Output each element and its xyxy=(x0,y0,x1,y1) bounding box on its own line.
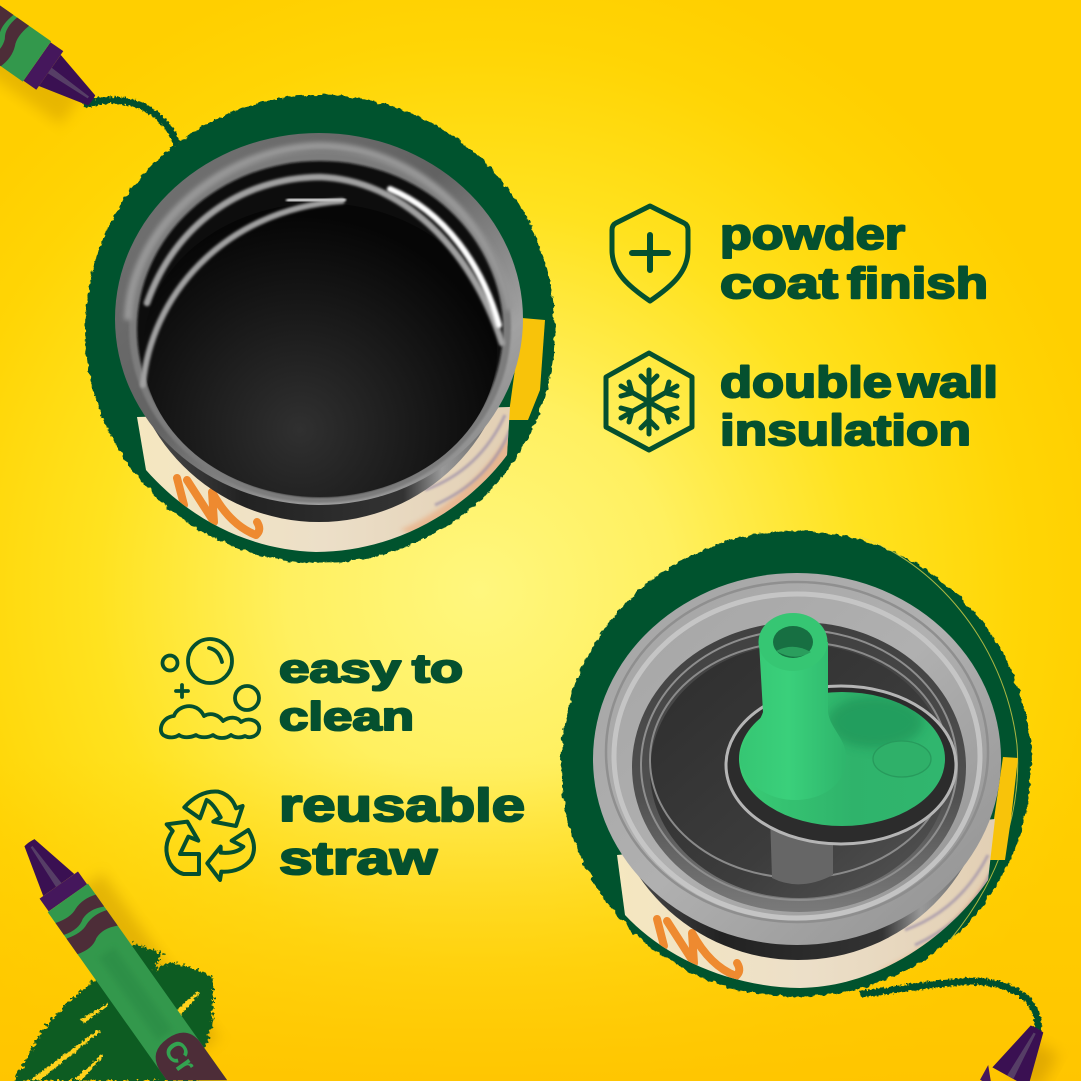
crayon bottom right xyxy=(980,1016,1065,1081)
crayon body xyxy=(48,884,227,1081)
tumbler with lid and straw xyxy=(593,573,1018,988)
straw xyxy=(740,613,846,800)
dark lower band xyxy=(606,580,990,960)
metal rim xyxy=(115,133,523,505)
feature: powder coat finish: powder xyxy=(720,210,905,259)
crayon bottom left xyxy=(9,828,227,1081)
cup body xyxy=(137,407,512,552)
cup body xyxy=(617,819,995,988)
feature: reusable straw: reusable xyxy=(279,779,525,831)
feature: powder coat finish xyxy=(720,210,988,308)
crayon logo oval xyxy=(147,1024,227,1081)
straw under lid xyxy=(770,815,833,884)
feature: easy to clean: clean xyxy=(279,695,414,739)
interior bore xyxy=(143,203,497,497)
crayon tip xyxy=(39,55,103,116)
icon: soap bubbles xyxy=(161,639,259,738)
feature: powder coat finish: finish xyxy=(847,259,988,308)
yellow tab xyxy=(508,318,545,420)
crayon scribble bottom left xyxy=(15,943,213,1081)
feature: double wall insulation: double xyxy=(720,358,892,407)
brush circle right xyxy=(561,531,1031,997)
crayon top left xyxy=(0,0,107,132)
feature: easy to clean: easy xyxy=(279,647,402,691)
disc button xyxy=(873,741,931,777)
crayon tip xyxy=(13,832,74,896)
yellow tab xyxy=(988,757,1018,860)
feature: double wall insulation: insulation xyxy=(720,406,971,455)
dark lower rim band xyxy=(127,140,511,522)
icon: recycle arrows xyxy=(166,792,254,880)
ring around disc xyxy=(726,686,956,844)
green disc xyxy=(739,692,945,826)
tumbler open top view xyxy=(115,133,545,552)
crayon stroke line bottom right xyxy=(860,981,1038,1030)
feature: easy to clean: to xyxy=(412,647,463,691)
feature: double wall insulation: wall xyxy=(897,358,998,407)
crayon bottom left shadow xyxy=(71,873,219,1060)
feature: easy to clean xyxy=(279,647,463,739)
inner wall xyxy=(129,151,511,503)
crayon stroke line top left xyxy=(84,100,178,146)
icon: shield plus xyxy=(612,206,688,301)
lid inner wall xyxy=(632,622,966,912)
feature: reusable straw: straw xyxy=(279,832,437,884)
brush circle left xyxy=(85,95,555,563)
crayon body xyxy=(0,0,51,82)
feature: powder coat finish: coat xyxy=(720,259,838,308)
lid glass xyxy=(650,644,948,898)
feature: double wall insulation xyxy=(720,358,998,455)
highlight arcs xyxy=(143,177,502,385)
rim light band xyxy=(128,146,510,320)
icon: hexagon snowflake xyxy=(606,353,692,450)
lid outer ring xyxy=(593,573,1001,945)
crayon logo text: Cr xyxy=(157,1035,202,1079)
disc shadow xyxy=(827,696,923,748)
feature: reusable straw xyxy=(279,779,525,884)
